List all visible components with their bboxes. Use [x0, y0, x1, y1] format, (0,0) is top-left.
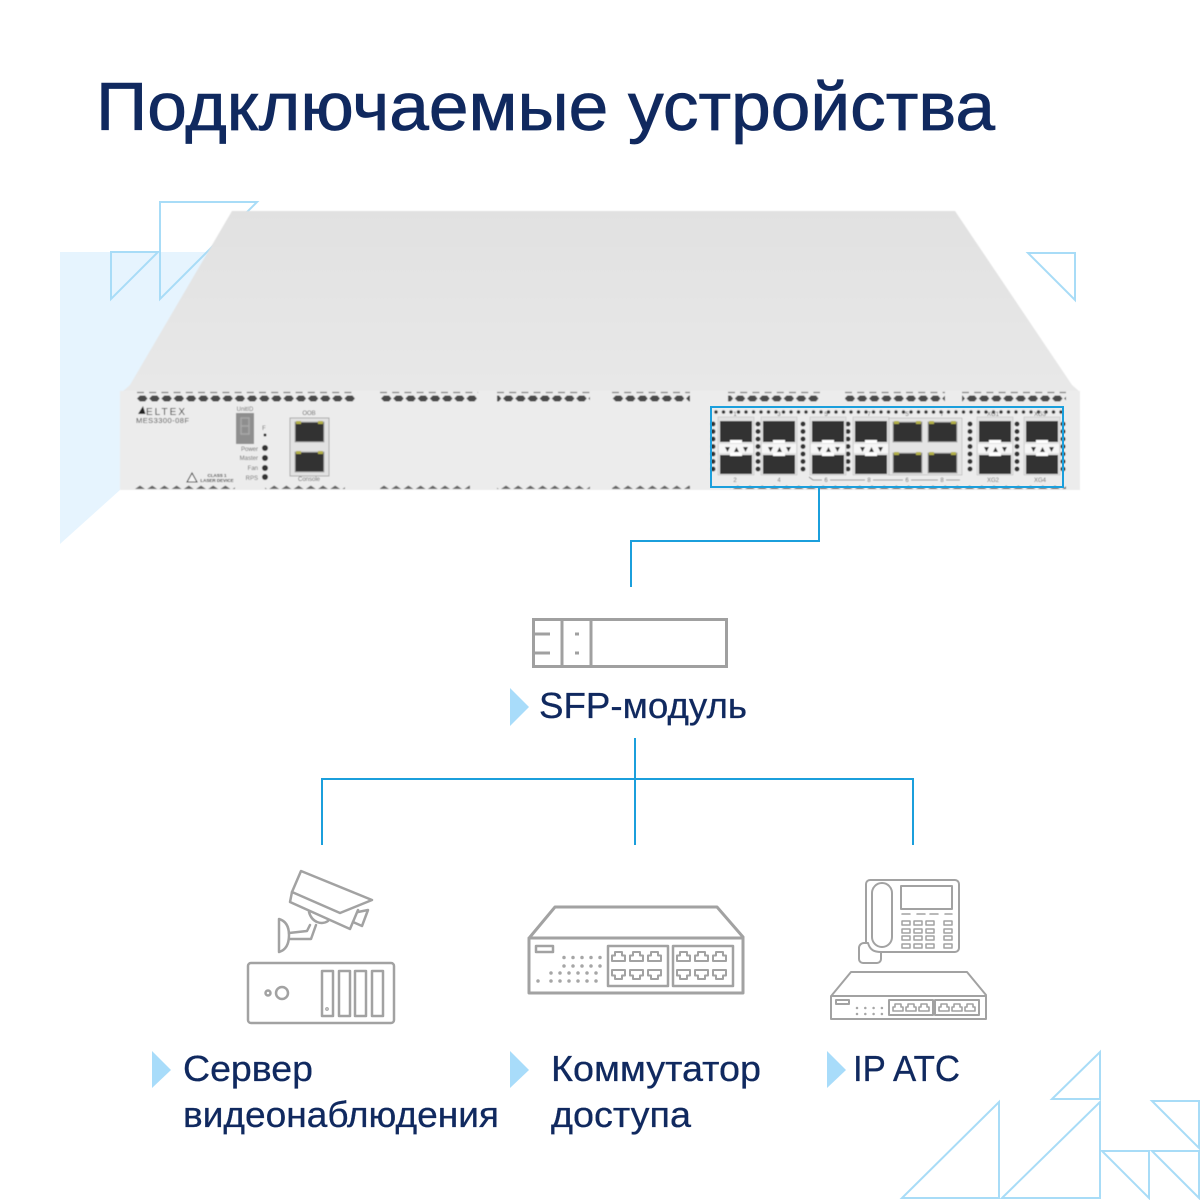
- icon: IP phone and IP PBX: [831, 880, 986, 1019]
- port numbers: 1: [733, 412, 737, 418]
- decorative background: light blue shape and triangles behind device: [60, 202, 1075, 544]
- device front panel: [120, 391, 1080, 490]
- icon: access switch: [529, 907, 743, 993]
- laser warning: [187, 473, 234, 483]
- port numbers: 3: [777, 412, 781, 418]
- camera: [279, 871, 372, 952]
- port numbers: 7: [940, 412, 944, 418]
- port numbers: XG3: [1034, 412, 1047, 418]
- port numbers: 2: [733, 478, 737, 484]
- port numbers: XG4: [1034, 478, 1047, 484]
- unit id indicator: F: [262, 426, 266, 432]
- management ports OOB and Console: [290, 411, 329, 483]
- port numbers: 5: [905, 412, 909, 418]
- icon: camera and video server: [248, 871, 394, 1023]
- rj45 ports: [889, 418, 962, 475]
- status leds: Master: [240, 456, 258, 462]
- port numbers: 8: [940, 478, 944, 484]
- status leds: Power: [241, 447, 258, 453]
- status leds: Fan: [248, 466, 258, 472]
- label: IP PBX: IP ATC: [853, 1048, 960, 1089]
- phone: [859, 880, 959, 963]
- brand logo text: ELTEX: [146, 407, 185, 418]
- label: SFP module: SFP-модуль: [539, 685, 747, 726]
- port numbers: XG2: [987, 478, 1000, 484]
- icon: SFP module: [533, 619, 726, 667]
- highlight frame around ports: [711, 407, 1063, 487]
- management ports OOB and Console: Console: [298, 477, 321, 483]
- port numbers: 7: [867, 412, 871, 418]
- port numbers: 5: [824, 412, 828, 418]
- PBX switch: [831, 972, 986, 1019]
- label: video server: видеонаблюдения: [183, 1094, 499, 1135]
- management ports OOB and Console: OOB: [302, 411, 316, 417]
- label: access switch: [510, 1048, 761, 1135]
- connector tree to devices: [322, 738, 913, 845]
- status leds: [240, 445, 268, 482]
- port numbers: [733, 412, 1047, 484]
- unit id indicator: [236, 407, 266, 444]
- label: access switch: Коммутатор: [551, 1048, 761, 1089]
- model name: MES3300-08F: [136, 416, 189, 425]
- label: video server: [152, 1048, 499, 1135]
- connector: device to SFP module: [631, 487, 819, 587]
- logo mark: [138, 406, 146, 414]
- top vents: [135, 392, 1066, 490]
- port numbers: 4: [777, 478, 781, 484]
- device top surface: [122, 211, 1080, 392]
- laser warning: LASER DEVICE: [200, 478, 234, 483]
- video server: [248, 963, 394, 1023]
- port numbers: 6: [824, 478, 828, 484]
- port numbers: XG1: [987, 412, 1000, 418]
- label: video server: Сервер: [183, 1048, 313, 1089]
- device: network switch MES3300-08F: [120, 211, 1080, 490]
- sfp ports: [718, 417, 1060, 475]
- title: Подключаемые устройства: [96, 69, 995, 145]
- label: access switch: доступа: [551, 1094, 692, 1135]
- port numbers: 8: [867, 478, 871, 484]
- unit id indicator: UnitID: [237, 407, 254, 413]
- arrow: SFP module: [510, 688, 529, 726]
- decorative triangles bottom right: [902, 1052, 1199, 1198]
- port field perforation: [713, 412, 1063, 474]
- status leds: RPS: [246, 476, 258, 482]
- port numbers: 6: [905, 478, 909, 484]
- laser warning: CLASS 1: [207, 473, 227, 478]
